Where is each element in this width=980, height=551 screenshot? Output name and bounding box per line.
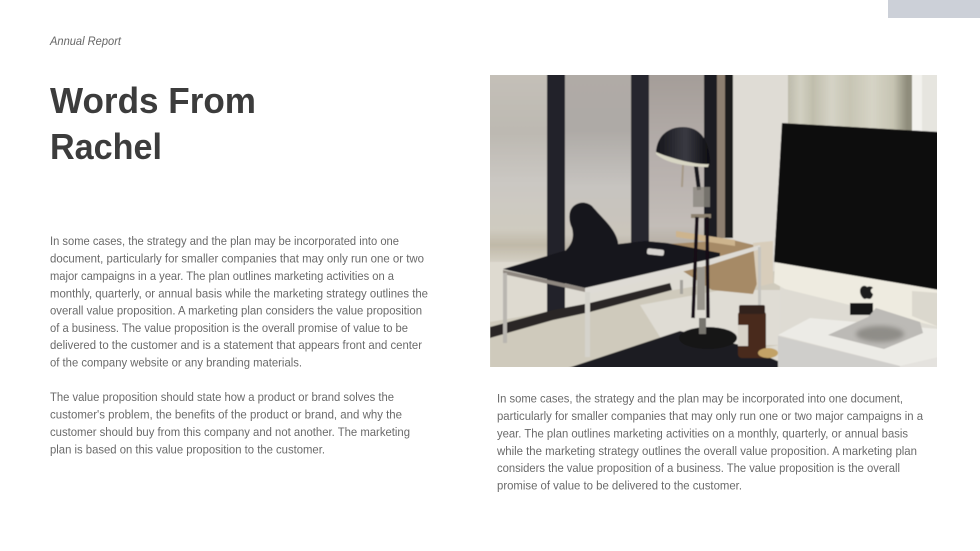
photo: desk lamp — [656, 127, 737, 349]
photo: floor — [490, 270, 780, 369]
title: Rachel — [50, 126, 162, 167]
photo: black table — [503, 241, 761, 357]
title: Words From — [50, 80, 256, 121]
left body text: first paragraph: document, particularly for smaller companies that may only run one or two — [50, 252, 424, 266]
right body text: considers the value proposition of a business. The value proposition is the overall — [497, 461, 900, 475]
eyebrow label: Annual Report — [49, 36, 122, 48]
corner accent block — [888, 0, 980, 18]
photo: window panes and columns — [488, 73, 939, 322]
left body text: first paragraph: In some cases, the strategy and the plan may be incorporated into one — [50, 234, 399, 248]
right body text: particularly for smaller companies that may only run one or two major campaigns in a — [497, 409, 923, 423]
left body text: second paragraph: plan is based on this value proposition to the customer. — [50, 442, 325, 456]
right body text: while the marketing strategy outlines the overall value proposition. A marketing plan — [496, 444, 917, 458]
photo: amber glass jar — [738, 305, 778, 358]
left body text: first paragraph: overall value proposition. A marketing plan considers the value proposition — [50, 304, 422, 318]
left body text: second paragraph: The value proposition should state how a product or brand solves the — [50, 390, 394, 404]
left body text: second paragraph — [50, 390, 410, 456]
right body text: year. The plan outlines marketing activities on a monthly, quarterly, or annual basis — [497, 426, 908, 440]
right body text: In some cases, the strategy and the plan may be incorporated into one document, — [497, 392, 903, 406]
photo: black woven bag — [566, 202, 619, 251]
left body text: first paragraph: monthly, quarterly, or annual basis while the marketing strategy outlines the — [50, 286, 428, 300]
left body text: first paragraph: major campaigns in a year. The plan outlines marketing activities on a — [50, 269, 394, 283]
left body text: first paragraph: of the company website or any branding materials. — [50, 356, 302, 370]
title — [50, 80, 256, 167]
photo: computer monitor — [774, 123, 939, 349]
left body text: first paragraph — [50, 234, 428, 370]
photo: wicker basket — [672, 240, 758, 294]
photo: desk with lamp and monitor — [488, 73, 939, 369]
right body text — [496, 392, 923, 492]
left body text: first paragraph: of a business. The value proposition is the overall promise of value to be — [50, 321, 408, 335]
photo: white drawer unit — [778, 318, 939, 369]
left body text: first paragraph: delivered to the customer and is a statement that appears front and center — [50, 338, 422, 352]
right body text: promise of value to be delivered to the customer. — [497, 478, 742, 492]
photo: dark foreground desk — [565, 331, 780, 369]
left body text: second paragraph: customer should buy from this company and not another. The marketing — [50, 425, 410, 439]
left body text: second paragraph: customer's problem, the benefits of the product or brand, and why the — [50, 408, 402, 422]
